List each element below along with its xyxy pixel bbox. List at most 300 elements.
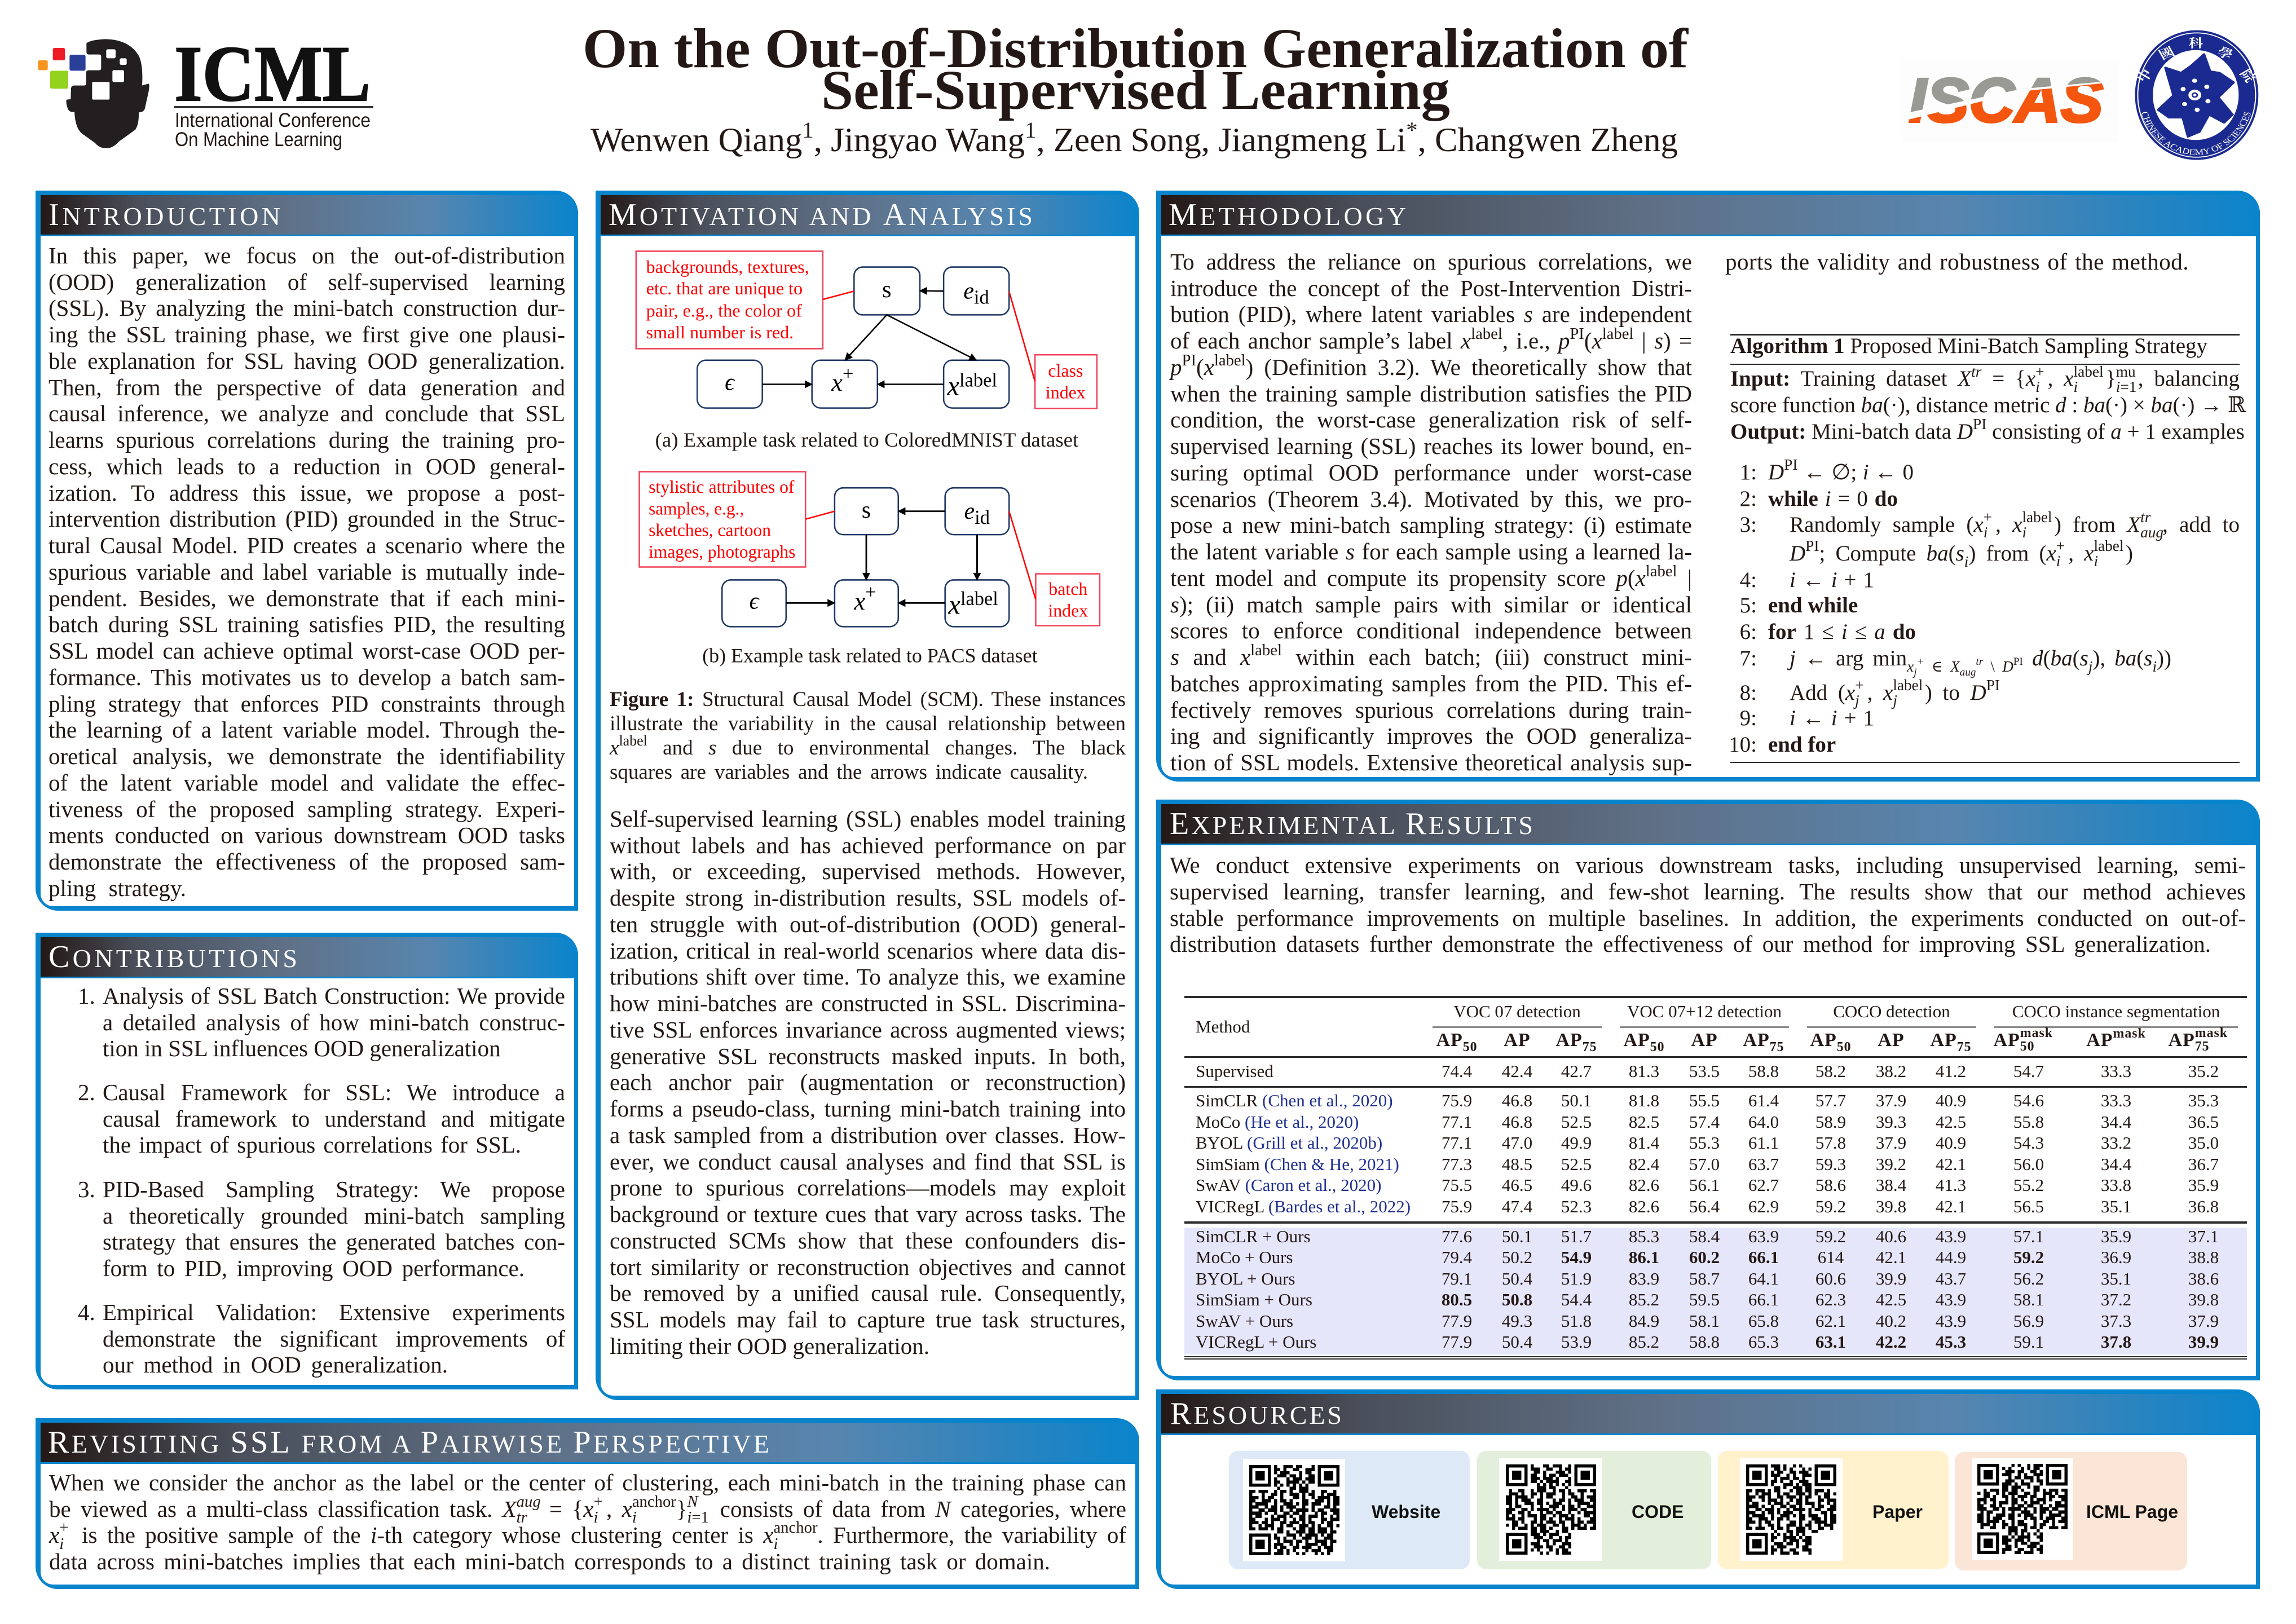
contribution 3 (78, 1176, 565, 1281)
text: motivation body: without labels and has achieved performance on par (610, 832, 1126, 858)
text: motivation body: ten struggle with out-of-distribution (OOD) general- (610, 911, 1126, 937)
authors: * (1406, 117, 1418, 143)
algorithm box: + (2056, 537, 2065, 554)
figure: SCM diagrams (635, 250, 1101, 667)
table: results: 39.9 (1876, 1269, 1906, 1288)
table: results: 62.1 (1815, 1310, 1846, 1331)
table: results: SimSiam (Chen & He, 2021) (1196, 1154, 1399, 1174)
table: results: VICRegL + Ours (1196, 1332, 1316, 1351)
text: motivation body: be removed by a unified causal rule. Consequently, (610, 1280, 1126, 1306)
table: results: 42.2 (1876, 1332, 1906, 1351)
diagram (a): etc. that are unique to (646, 279, 803, 298)
text: introduction body: learns spurious correlations during the training pro- (49, 427, 565, 453)
algorithm box: 4: (1740, 568, 1757, 592)
algorithm box: Input: Training dataset Xtr = {x , x } , balancing (1730, 363, 2240, 391)
text: motivation body: background or texture cues that vary across tasks. The (610, 1201, 1126, 1227)
text: methodology left column: suring optimal OOD performance under worst-case (1170, 460, 1692, 486)
table: results: 58.1 (2013, 1289, 2044, 1309)
table: results: 38.2 (1876, 1061, 1906, 1080)
algorithm box: label (1893, 677, 1923, 694)
table: results: 79.1 (1442, 1269, 1472, 1288)
card: paper: Paper (1872, 1502, 1923, 1522)
diagram (b): samples, e.g., (649, 498, 744, 518)
table: results: AP (2168, 1030, 2195, 1050)
table: results: 57.7 (1815, 1091, 1846, 1110)
text: methodology left column: tent model and compute its propensity score p(xlabel | (1170, 562, 1692, 591)
table: results: 58.6 (1815, 1175, 1846, 1194)
text: introduction body: of the latent variable model and validate the effec- (49, 770, 565, 796)
algorithm box: j (1855, 692, 1859, 709)
table: results: AP50 (1810, 1030, 1852, 1054)
text: revisiting body: tr (517, 1508, 527, 1526)
contribution 1: tion in SSL influences OOD generalization (103, 1035, 501, 1061)
table: results: 45.3 (1936, 1332, 1966, 1351)
table: results: 50.4 (1502, 1269, 1532, 1288)
diagram (b): batch (1048, 579, 1087, 599)
table: results: 56.0 (2013, 1154, 2044, 1174)
table: results: 60.6 (1815, 1269, 1846, 1288)
title: Self-Supervised Learning (821, 59, 1450, 121)
table: results: 64.1 (1748, 1269, 1779, 1288)
table: results: 50.4 (1502, 1332, 1532, 1351)
table: results: 62.7 (1748, 1175, 1779, 1194)
table: results: BYOL + Ours (1196, 1269, 1295, 1288)
table: results: 40.9 (1936, 1132, 1966, 1153)
algorithm box: 5: (1740, 593, 1757, 617)
algorithm box (1729, 334, 2246, 763)
table: results: VOC 07 detection (1453, 1001, 1581, 1021)
figure caption: squares are variables and the arrows indicate causality. (610, 761, 1088, 784)
logo: ICML (38, 30, 373, 151)
text: revisiting body: data across mini-batches implies that each mini-batch corresponds to a distinct training task or domain. (49, 1548, 1050, 1574)
text: motivation body: ever, we conduct causal analyses and find that SSL is (610, 1149, 1126, 1175)
algorithm box: j (1893, 692, 1897, 709)
card: website: Website (1372, 1502, 1440, 1522)
logos: ISCAS and Chinese Academy of Sciences (1909, 30, 2262, 160)
table: results: 58.9 (1815, 1112, 1846, 1131)
algorithm box: 9: (1740, 706, 1757, 730)
authors: Wenwen Qiang (590, 121, 799, 158)
diagram (a): x (948, 372, 959, 401)
table: results: AP (1878, 1030, 1905, 1050)
text: methodology right column: ports the validity and robustness of the method. (1725, 249, 2189, 275)
table: results: Method (1196, 1016, 1250, 1036)
text: methodology left column: fectively removes spurious correlations during train- (1170, 697, 1692, 723)
table: results: 39.9 (2188, 1332, 2219, 1351)
table: results: 59.1 (2013, 1332, 2044, 1351)
table: results: 63.9 (1748, 1226, 1779, 1246)
table: results: 50.2 (1502, 1247, 1532, 1266)
conference name: International Conference (175, 109, 371, 131)
algorithm box: i (2035, 378, 2040, 395)
table: results: 54.4 (1561, 1289, 1592, 1309)
table: results: 35.9 (2101, 1226, 2131, 1246)
text: revisiting body: When we consider the anchor as the label or the center of clustering, each mini-batch in the training phase can (49, 1469, 1126, 1495)
algorithm box: 1: (1740, 460, 1757, 484)
text: methodology left column: introduce the concept of the Post-Intervention Distri- (1170, 275, 1692, 301)
text: methodology left column: when the training sample distribution satisfies the PID (1170, 381, 1692, 407)
table: results: 63.1 (1815, 1332, 1846, 1351)
text: motivation body: Self-supervised learning (SSL) enables model training (610, 806, 1126, 832)
text: motivation body: tort similarity or reconstruction objectives and cannot (610, 1254, 1126, 1280)
figure caption (609, 688, 1126, 784)
text: revisiting body: i (593, 1508, 598, 1526)
diagram (b): index (1048, 601, 1088, 621)
table: results: 82.5 (1629, 1112, 1659, 1131)
diagram (b): x (854, 587, 865, 615)
diagram (a): class (1048, 361, 1083, 381)
table: results: 46.8 (1502, 1091, 1532, 1110)
text: introduction body: SSL model can achieve optimal worst-case OOD per- (49, 638, 565, 664)
table: results: AP (1504, 1030, 1531, 1050)
logo: CAS seal: CHINESE ACADEMY OF SCIENCES (2141, 112, 2250, 155)
text: introduction body: tural Causal Model. PID creates a scenario where the (49, 532, 565, 558)
table: results: 58.7 (1689, 1269, 1720, 1288)
authors: 1 (1025, 117, 1036, 143)
title (583, 17, 1689, 121)
text: methodology left column: bution (PID), where latent variables s are independent (1170, 301, 1692, 327)
algorithm box: tr (2140, 509, 2150, 526)
algorithm box: Output: Mini-batch data DPI consisting of a + 1 examples (1730, 416, 2245, 444)
table: results: 56.2 (2013, 1269, 2044, 1288)
text: revisiting body: i=1 (687, 1508, 709, 1526)
contribution 4 (78, 1299, 565, 1378)
table: results: 77.9 (1442, 1310, 1472, 1331)
text: motivation body: constructed SCMs show that these confounders dis- (610, 1228, 1126, 1254)
panel: contributions: 2. (78, 1079, 95, 1105)
table: results: 37.9 (1876, 1132, 1906, 1153)
table: results: 57.0 (1689, 1154, 1720, 1174)
logo: CAS seal (2131, 30, 2262, 160)
text: methodology left column (1169, 249, 1692, 775)
table: results: VICRegL (Bardes et al., 2022) (1196, 1197, 1411, 1216)
algorithm box: label (2022, 509, 2052, 526)
text: motivation body: forms a pseudo-class, turning mini-batch training into (610, 1096, 1126, 1122)
contribution 3: strategy that ensures the generated batches con- (103, 1229, 565, 1255)
text: motivation body: how mini-batches are constructed in SSL. Discrimina- (610, 990, 1126, 1016)
diagram (a) (636, 251, 1097, 451)
table: results: 43.9 (1936, 1289, 1966, 1309)
diagram (a): e (963, 278, 974, 304)
text: introduction body: intervention distribution (PID) grounded in the Struc- (49, 506, 565, 532)
heading: experimental results: EXPERIMENTAL RESULTS (1170, 806, 1533, 841)
text: methodology left column: ing and significantly improves the OOD generaliza- (1170, 723, 1692, 749)
text: introduction body: (OOD) generalization of self-supervised learning (49, 269, 565, 295)
text: revisiting body: + (593, 1493, 603, 1511)
table: results: 47.4 (1502, 1197, 1532, 1216)
table: results: 58.4 (1689, 1226, 1720, 1246)
text: methodology left column: s and xlabel within each batch; (iii) construct mini- (1170, 641, 1692, 670)
table: results: 58.2 (1815, 1061, 1846, 1080)
panel: motivation and analysis (596, 191, 1139, 1400)
algorithm box: i (1984, 524, 1987, 541)
contribution 4: our method in OOD generalization. (103, 1352, 448, 1378)
conference name: On Machine Learning (175, 129, 342, 151)
table: results: 56.5 (2013, 1197, 2044, 1216)
text: motivation body: SSL models may fail to capture true task structures, (610, 1307, 1126, 1332)
text: introduction body: pling strategy that enforces PID constraints through (49, 691, 565, 717)
algorithm box: i (2094, 553, 2098, 570)
table: results: 54.6 (2013, 1091, 2044, 1110)
table: results: SwAV (Caron et al., 2020) (1196, 1175, 1382, 1194)
algorithm box: DPI; Compute ba(si) from (x , x ) (1790, 537, 2133, 570)
diagram (a): x (831, 368, 843, 396)
table: results: 77.1 (1442, 1112, 1472, 1131)
algorithm box: aug (2140, 524, 2163, 541)
text: introduction body: formance. This motivates us to develop a batch sam- (49, 664, 565, 690)
figure caption: illustrate the variability in the causal relationship between (610, 712, 1126, 735)
text: revisiting body: be viewed as a multi-class classification task. X = {x , x } consists of data from N categories, where (49, 1496, 1126, 1522)
table: results: 51.7 (1561, 1226, 1592, 1246)
algorithm box: end for (1768, 732, 1836, 757)
table: results: 81.3 (1629, 1061, 1659, 1080)
heading: revisiting: REVISITING SSL FROM A PAIRWISE PERSPECTIVE (48, 1425, 769, 1460)
panel: contributions (36, 933, 578, 1389)
text: introduction body: (SSL). By analyzing the mini-batch construction dur- (49, 295, 565, 321)
table: results: 50 (2020, 1039, 2035, 1054)
panel: resources (1156, 1389, 2260, 1589)
table: results: 55.2 (2013, 1175, 2044, 1194)
table: results: 36.7 (2188, 1154, 2219, 1174)
table: results: 57.4 (1689, 1112, 1720, 1131)
table: results: 77.3 (1442, 1154, 1472, 1174)
table: results: 35.3 (2188, 1091, 2219, 1110)
text: revisiting body: i (59, 1535, 64, 1553)
table: results: 59.3 (1815, 1154, 1846, 1174)
text: methodology left column: of each anchor sample’s label xlabel, i.e., pPI(xlabel | s) = (1170, 325, 1692, 354)
table: results: 81.4 (1629, 1132, 1659, 1153)
diagram (b) (640, 471, 1100, 667)
text: introduction body: pling strategy. (49, 875, 186, 901)
table: results: 82.6 (1629, 1175, 1659, 1194)
table: results: 57.1 (2013, 1226, 2044, 1246)
diagram (b): ϵ (750, 588, 760, 614)
text: revisiting body: anchor (632, 1493, 676, 1511)
algorithm box: i ← i + 1 (1790, 706, 1874, 730)
algorithm box: i (2056, 553, 2060, 570)
algorithm box: i ← i + 1 (1790, 568, 1874, 592)
card: code: CODE (1632, 1502, 1684, 1522)
table: results: 58.8 (1689, 1332, 1720, 1351)
algorithm box: label (2074, 363, 2104, 380)
table: results: SimCLR + Ours (1196, 1226, 1311, 1246)
text: motivation body: prone to spurious correlations—models may exploit (610, 1175, 1126, 1201)
logo: CAS seal: 國 (2155, 42, 2178, 63)
text: methodology left column: s); (ii) match sample pairs with similar or identical (1170, 592, 1692, 617)
text: experimental results body (1170, 852, 2246, 957)
text: motivation body: ization, critical in real-world scenarios where data dis- (610, 938, 1126, 964)
text: experimental results body: supervised learning, transfer learning, and few-shot learning. The results show that our method achieves (1170, 879, 2246, 904)
algorithm box: + (2035, 363, 2044, 380)
table: results: 37.9 (2188, 1310, 2219, 1331)
table: results: 35.0 (2188, 1132, 2219, 1153)
algorithm box: 7: (1740, 646, 1757, 670)
contribution 3: a theoretically grounded mini-batch sampling (103, 1203, 565, 1229)
table: results: 52.5 (1561, 1112, 1592, 1131)
table: results: 43.7 (1936, 1269, 1966, 1288)
table: results: 63.7 (1748, 1154, 1779, 1174)
diagram (b): (b) Example task related to PACS dataset (702, 645, 1038, 667)
table: results: 51.8 (1561, 1310, 1592, 1331)
panel: revisiting SSL from a pairwise perspective (36, 1418, 1139, 1589)
text: methodology left column: supervised learning (SSL) reaches its lower bound, en- (1170, 433, 1692, 459)
table: results: MoCo (He et al., 2020) (1196, 1112, 1359, 1131)
diagram (b): + (865, 582, 876, 603)
table: results: 75 (2195, 1039, 2210, 1054)
algorithm box: 10: (1729, 732, 1757, 757)
table: results: 51.9 (1561, 1269, 1592, 1288)
ICML wordmark: ICML (174, 30, 371, 118)
table: results: 42.5 (1936, 1112, 1966, 1131)
contribution 2 (78, 1079, 565, 1158)
algorithm box: + (1984, 509, 1992, 526)
table: results: 56.9 (2013, 1310, 2044, 1331)
table: results: 75.5 (1442, 1175, 1472, 1194)
table: results: 75.9 (1442, 1091, 1472, 1110)
text: methodology left column: scores to enforce conditional independence between (1170, 617, 1692, 643)
authors: , Jingyao Wang (814, 121, 1025, 158)
table: results: AP75 (1743, 1030, 1784, 1054)
logo: CAS seal: 學 (2214, 41, 2237, 63)
table: results: 85.2 (1629, 1332, 1659, 1351)
diagram (b): s (862, 497, 871, 523)
table: results: 66.1 (1748, 1289, 1779, 1309)
table: results: 62.9 (1748, 1197, 1779, 1216)
contribution 2: the impact of spurious correlations for SSL. (103, 1132, 521, 1158)
algorithm box: 6: (1740, 620, 1757, 644)
heading: experimental results (1161, 804, 2260, 844)
table: results: 74.4 (1442, 1061, 1472, 1080)
text: revisiting body (49, 1469, 1127, 1574)
table: results: 66.1 (1748, 1247, 1779, 1266)
text: methodology left column: pPI(xlabel) (Definition 3.2). We theoretically show that (1170, 351, 1692, 380)
diagram (a): backgrounds, textures, (646, 257, 809, 277)
table: results: 42.1 (1936, 1154, 1966, 1174)
table: results: 44.9 (1936, 1247, 1966, 1266)
text: revisiting body: anchor (773, 1519, 818, 1537)
table: results: 64.0 (1748, 1112, 1779, 1131)
text: motivation body: each anchor pair (augmentation or reconstruction) (610, 1069, 1126, 1095)
table: results: 36.8 (2188, 1197, 2219, 1216)
contribution 4: Empirical Validation: Extensive experiments (103, 1299, 565, 1325)
table: results: MoCo + Ours (1196, 1247, 1293, 1266)
table: results: 46.5 (1502, 1175, 1532, 1194)
table: results: 65.3 (1748, 1332, 1779, 1351)
table: results: 41.3 (1936, 1175, 1966, 1194)
table: results: 56.1 (1689, 1175, 1720, 1194)
table: results: 58.1 (1689, 1310, 1720, 1331)
text: introduction body: ing the SSL training phase, we first give one plausi- (49, 321, 565, 347)
text: introduction body: Then, from the perspective of data generation and (49, 374, 565, 400)
contribution 3: form to PID, improving OOD performance. (103, 1255, 525, 1281)
table: results: 55.8 (2013, 1112, 2044, 1131)
table: results: SimCLR (Chen et al., 2020) (1196, 1091, 1393, 1110)
text: introduction body: batch during SSL training satisfies PID, the resulting (49, 611, 565, 637)
text: revisiting body: i (773, 1535, 778, 1553)
card: ICML page: ICML Page (2086, 1502, 2178, 1522)
table: results: 59.2 (1815, 1226, 1846, 1246)
table: results: 35.1 (2101, 1269, 2131, 1288)
table: results: 57.8 (1815, 1132, 1846, 1153)
card: code (1477, 1451, 1711, 1569)
table: results: 33.2 (2101, 1132, 2131, 1153)
text: experimental results body: stable performance improvements on multiple baselines. In addition, the experiments conducted on out-of- (1170, 904, 2246, 930)
algorithm box: Add (x , x ) to DPI (1790, 677, 2000, 705)
table: results: 38.6 (2188, 1269, 2219, 1288)
table: results: 33.3 (2101, 1061, 2131, 1080)
table: results: 60.2 (1689, 1247, 1720, 1266)
table: results (1184, 996, 2247, 1360)
text: introduction body: cess, which leads to a reduction in OOD general- (49, 453, 565, 479)
table: results: 82.4 (1629, 1154, 1659, 1174)
table: results: 77.6 (1442, 1226, 1472, 1246)
table: results: AP75 (1930, 1030, 1972, 1054)
icon: ICML head (38, 39, 149, 148)
heading: resources: RESOURCES (1170, 1396, 1342, 1431)
text: methodology left column: batches approximating samples from the PID. This ef- (1170, 670, 1692, 696)
diagram (a): (a) Example task related to ColoredMNIST dataset (655, 429, 1078, 451)
text: methodology left column: tion of SSL models. Extensive theoretical analysis sup- (1170, 749, 1692, 775)
table: results: 49.3 (1502, 1310, 1532, 1331)
table: results: 59.2 (2013, 1247, 2044, 1266)
table: results: 37.8 (2101, 1332, 2131, 1351)
table: results: 56.4 (1689, 1197, 1720, 1216)
text: introduction body: ble explanation for SSL having OOD generalization. (49, 348, 565, 374)
diagram (a): + (843, 363, 853, 385)
table: results: 35.9 (2188, 1175, 2219, 1194)
diagram (b): sketches, cartoon (649, 520, 771, 540)
table: results: 33.8 (2101, 1175, 2131, 1194)
table: results: 39.8 (1876, 1197, 1906, 1216)
table: results: 61.4 (1748, 1091, 1779, 1110)
table: results: 36.9 (2101, 1247, 2131, 1266)
table: results: 61.1 (1748, 1132, 1779, 1153)
text: introduction body (49, 242, 565, 901)
heading: contributions (41, 937, 578, 977)
table: results: 52.5 (1561, 1154, 1592, 1174)
panel: methodology (1156, 191, 2260, 782)
algorithm box: Randomly sample (x , x ) from X , add to (1790, 513, 2240, 537)
table: results: 54.3 (2013, 1132, 2044, 1153)
table: results: 42.4 (1502, 1061, 1532, 1080)
table: results: 40.9 (1936, 1091, 1966, 1110)
table: results: AP75 (1555, 1030, 1597, 1054)
text: introduction body: ization. To address this issue, we propose a post- (49, 480, 565, 506)
table: results: 58.8 (1748, 1061, 1779, 1080)
table: results: 52.3 (1561, 1197, 1592, 1216)
text: revisiting body: i (632, 1508, 637, 1526)
text: introduction body: the learning of a latent variable model. Through the- (49, 717, 565, 743)
table: results: BYOL (Grill et al., 2020b) (1196, 1132, 1382, 1153)
text: introduction body: ments conducted on various downstream OOD tasks (49, 822, 565, 848)
algorithm box: i=1 (2116, 378, 2136, 395)
table: results: 54.7 (2013, 1061, 2044, 1080)
panel: contributions: 3. (78, 1176, 95, 1202)
table: results: 81.8 (1629, 1091, 1659, 1110)
contribution 1: Analysis of SSL Batch Construction: We provide (103, 983, 565, 1009)
table: results: 46.8 (1502, 1112, 1532, 1131)
table: results: 35.2 (2188, 1061, 2219, 1080)
conference name (175, 109, 371, 151)
table: results: 85.3 (1629, 1226, 1659, 1246)
heading: introduction: INTRODUCTION (49, 197, 280, 232)
heading: methodology: METHODOLOGY (1169, 197, 1406, 232)
table: results: 47.0 (1502, 1132, 1532, 1153)
table: results: 48.5 (1502, 1154, 1532, 1174)
text: motivation body: despite strong in-distribution results, SSL models of- (610, 885, 1126, 911)
table: results: 53.9 (1561, 1332, 1592, 1351)
algorithm box: 2: (1740, 487, 1757, 511)
